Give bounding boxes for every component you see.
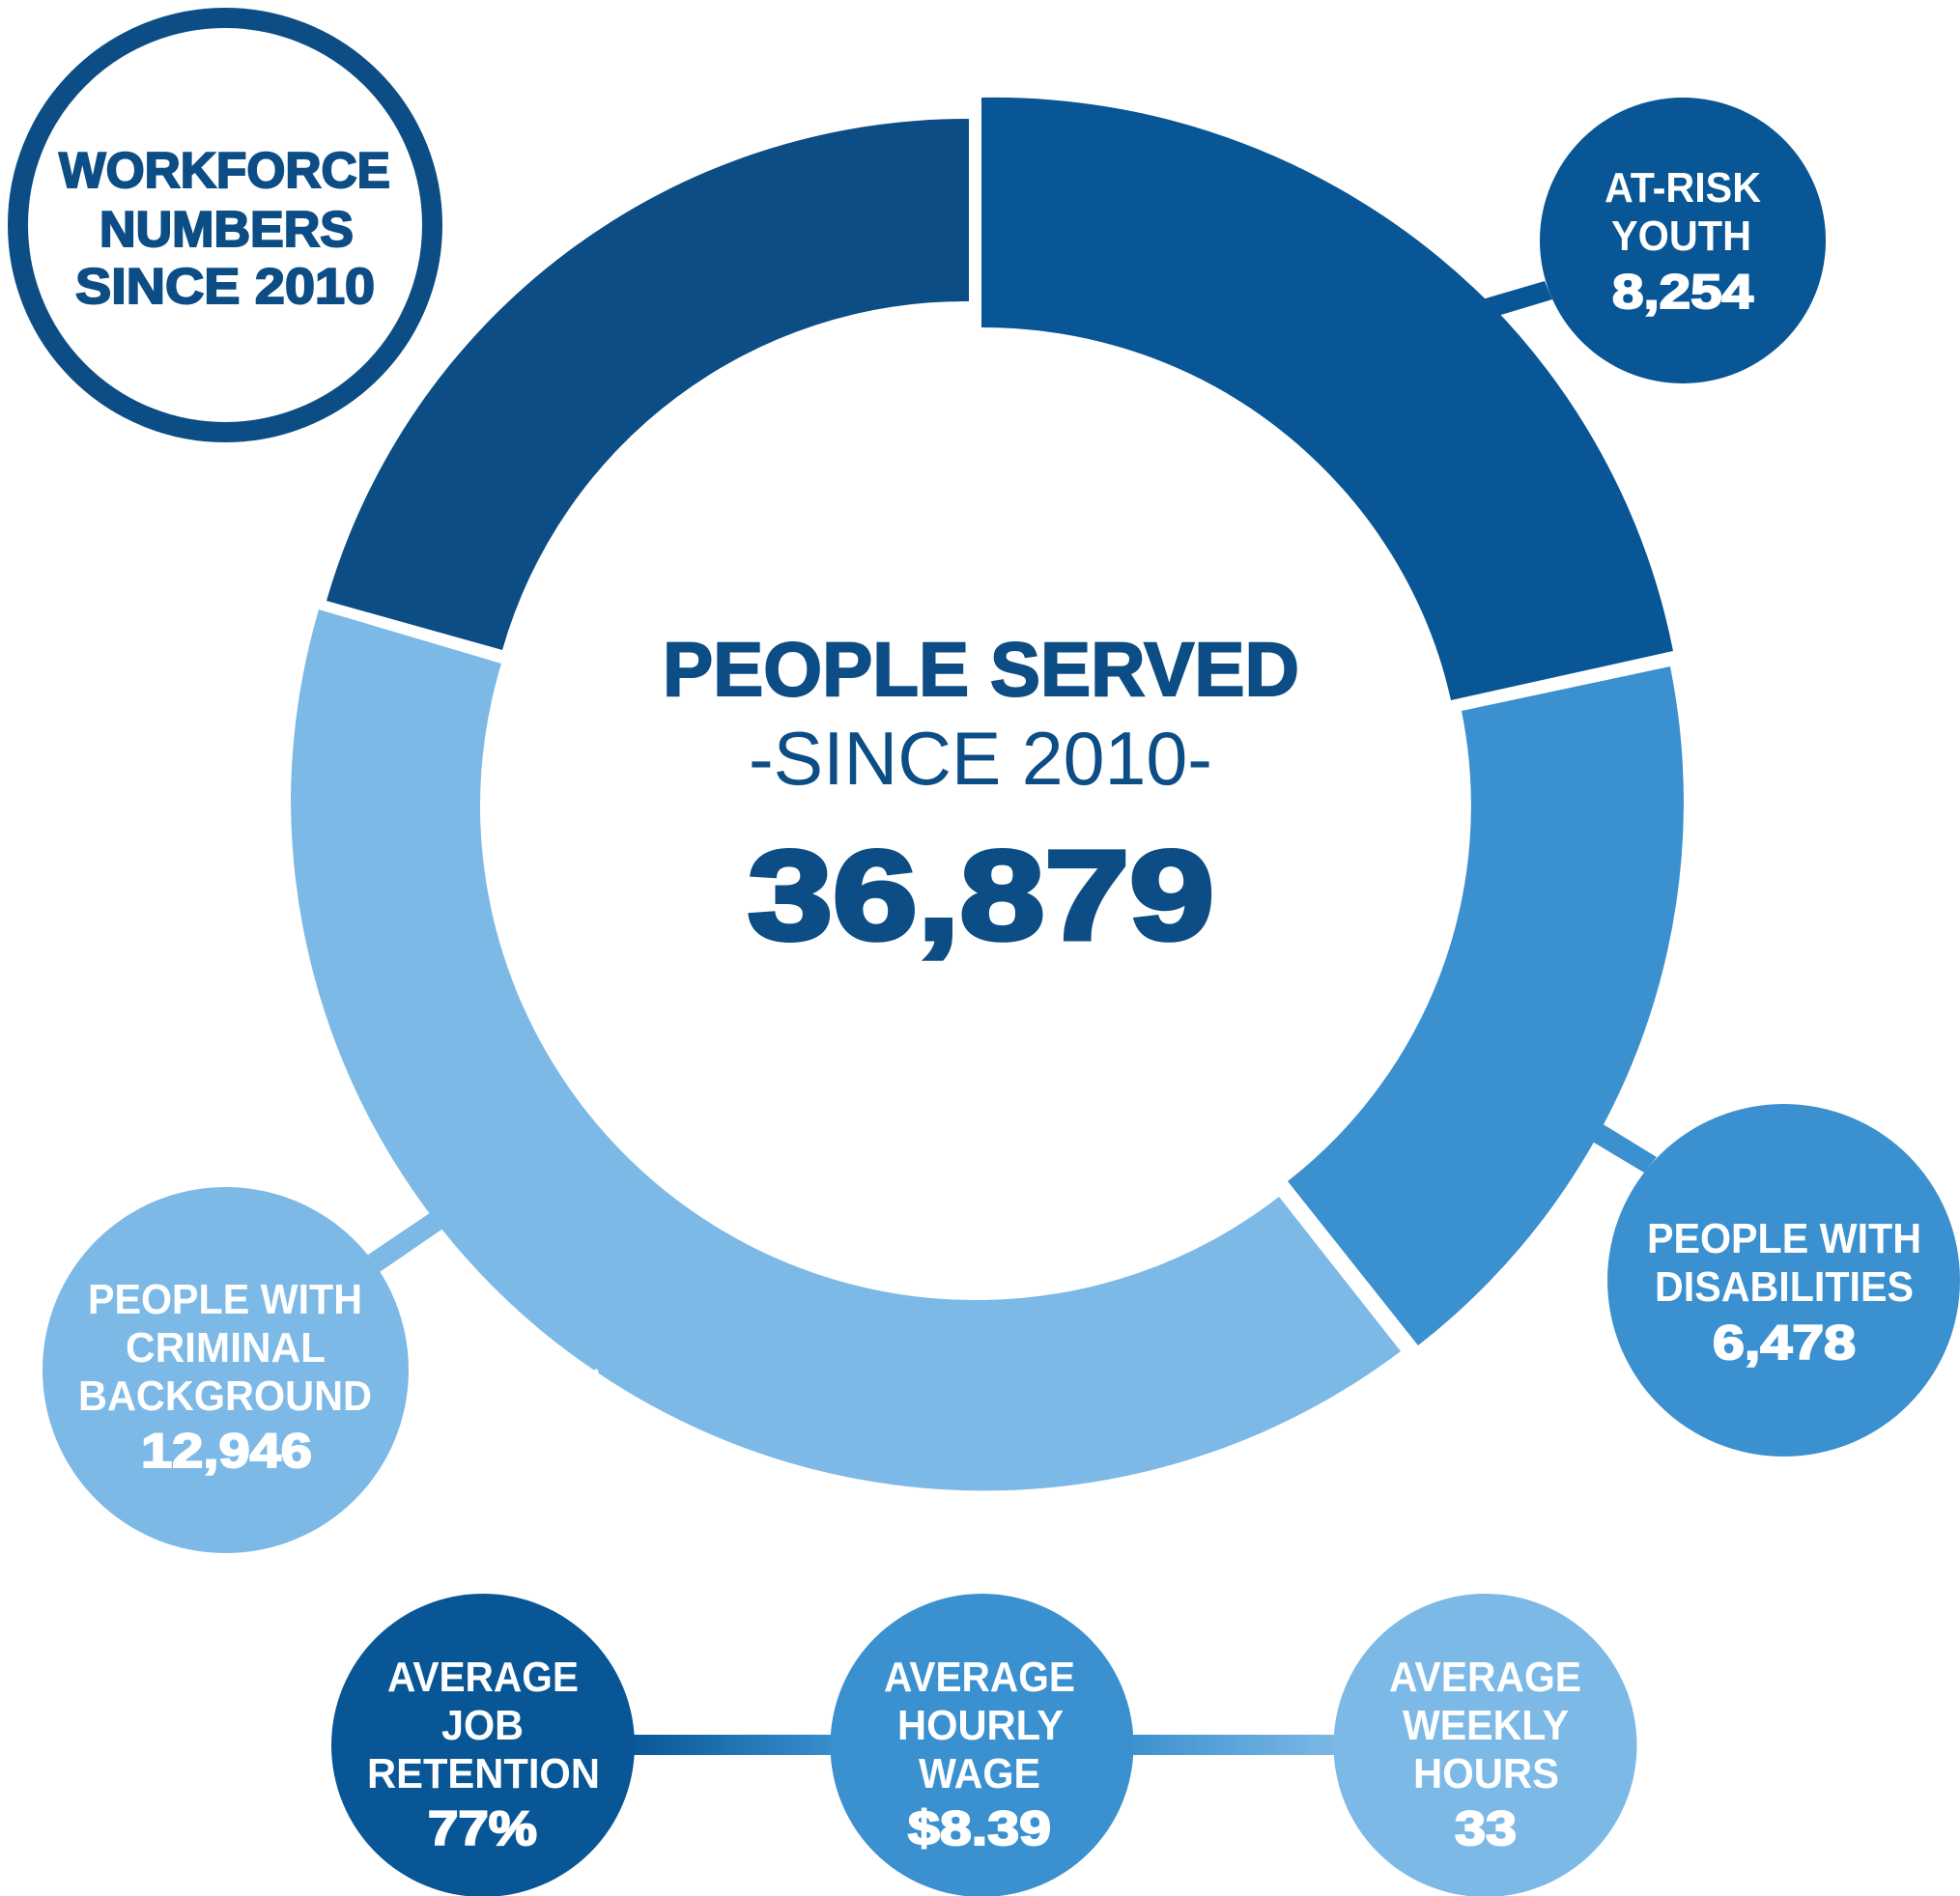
callout: at-risk youth	[1540, 98, 1826, 383]
stat: average hourly wage	[831, 1594, 1134, 1896]
center text: people served: 36,879	[748, 824, 1214, 966]
badge: workforce numbers since 2010	[17, 17, 433, 433]
callout: at-risk youth: AT-RISK	[1605, 164, 1761, 212]
stat: average job retention: RETENTION	[367, 1750, 600, 1797]
connector: wage to hours	[1125, 1735, 1340, 1755]
segment: people with criminal background	[291, 609, 1401, 1490]
callout: people with criminal background: BACKGROUND	[78, 1372, 372, 1420]
callout: people with disabilities: PEOPLE WITH	[1647, 1215, 1921, 1262]
stat: average job retention	[331, 1594, 635, 1896]
callout: people with criminal background	[43, 1187, 409, 1553]
center text: people served: PEOPLE SERVED	[663, 626, 1299, 712]
callout: people with disabilities: 6,478	[1713, 1316, 1856, 1370]
connector: people with disabilities	[1575, 1113, 1657, 1173]
badge: workforce numbers since 2010: NUMBERS	[99, 202, 354, 258]
segment: people with disabilities	[1288, 666, 1684, 1345]
stat: average weekly hours: 33	[1455, 1801, 1517, 1855]
connector: people with criminal background	[368, 1197, 466, 1272]
stat: average hourly wage: $8.39	[908, 1801, 1051, 1855]
callout: people with criminal background: CRIMINAL	[126, 1324, 326, 1372]
connector: at-risk youth	[1456, 281, 1552, 324]
callout: people with disabilities: DISABILITIES	[1655, 1263, 1914, 1311]
badge: workforce numbers since 2010: SINCE 2010	[75, 259, 375, 315]
callout: at-risk youth: 8,254	[1612, 265, 1753, 319]
stat: average weekly hours: AVERAGE	[1389, 1654, 1581, 1701]
stat: average hourly wage: WAGE	[919, 1750, 1040, 1797]
center text: people served	[663, 626, 1299, 966]
segment: unlabelled dark blue	[327, 119, 969, 650]
callout: people with disabilities	[1607, 1104, 1960, 1457]
donut chart	[291, 98, 1684, 1490]
stat: average weekly hours: HOURS	[1413, 1750, 1559, 1797]
stat: average job retention: 77%	[428, 1801, 537, 1855]
callout: people with criminal background: PEOPLE WITH	[88, 1276, 362, 1323]
stat: average job retention: AVERAGE	[387, 1654, 579, 1701]
stat: average weekly hours: WEEKLY	[1403, 1702, 1569, 1749]
stat: average hourly wage: AVERAGE	[884, 1654, 1075, 1701]
center text: people served: -SINCE 2010-	[749, 716, 1212, 801]
stat: average weekly hours	[1333, 1594, 1636, 1896]
callout: at-risk youth: YOUTH	[1611, 212, 1751, 260]
stat: average hourly wage: HOURLY	[897, 1702, 1064, 1749]
callout: people with criminal background: 12,946	[141, 1424, 312, 1478]
segment: at-risk youth	[981, 98, 1673, 700]
connector: retention to wage	[628, 1735, 840, 1755]
badge: workforce numbers since 2010: WORKFORCE	[59, 143, 390, 199]
stat: average job retention: JOB	[441, 1702, 524, 1749]
